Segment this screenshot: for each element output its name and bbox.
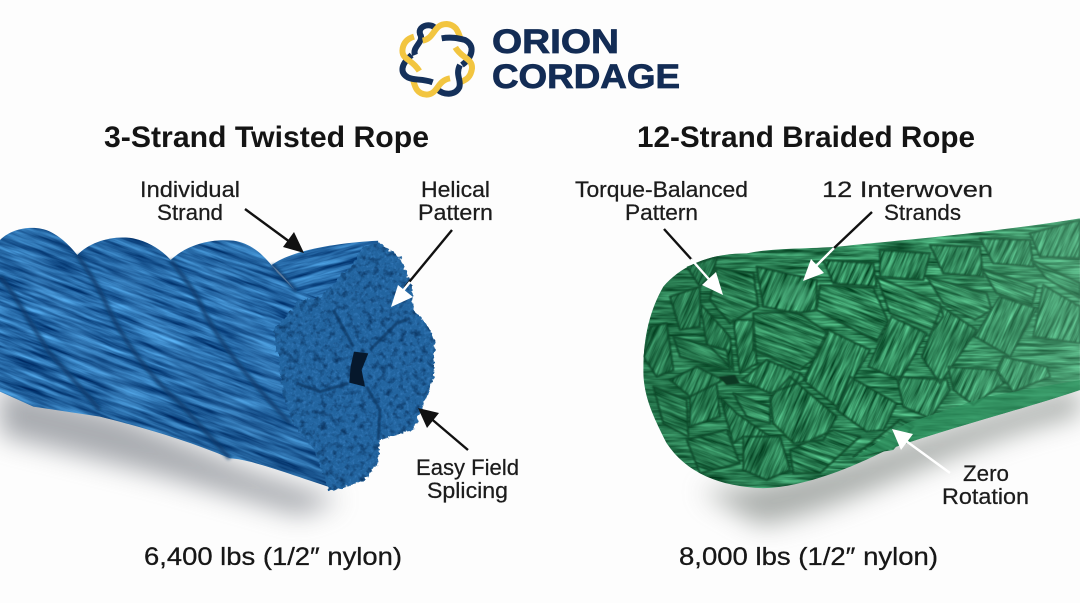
green rope photo illustration — [643, 218, 1080, 538]
blue rope body — [0, 145, 435, 529]
braid strands: along the weave — [643, 220, 1080, 480]
arrow: helical pattern — [391, 230, 452, 307]
label: torque-balanced pattern: Torque-Balanced — [575, 177, 748, 202]
strand edge shadows — [0, 255, 297, 458]
logo wordmark: CORDAGE — [492, 58, 680, 96]
label: 12 interwoven strands — [822, 177, 993, 225]
face fissures — [297, 310, 410, 440]
stat: 12-strand strength: 8,000 lbs (1/2″ nylon) — [679, 543, 938, 571]
dark core — [718, 375, 740, 385]
blue rope shadow — [0, 385, 340, 515]
logo wordmark: ORION — [492, 23, 619, 61]
label: easy field splicing: Splicing — [427, 478, 508, 503]
green rope body — [643, 218, 1080, 488]
centre highlight — [780, 284, 813, 306]
callout labels — [140, 177, 1029, 509]
back strand fibre texture — [272, 240, 378, 298]
label: individual strand: Individual — [140, 177, 240, 202]
label: 12 interwoven strands: Strands — [884, 200, 961, 225]
label: easy field splicing — [416, 455, 519, 503]
label: helical pattern: Pattern — [418, 200, 493, 225]
arrow: easy field splicing — [418, 408, 468, 450]
label: 12 interwoven strands: 12 Interwoven — [822, 177, 993, 202]
stat: 3-strand strength: 6,400 lbs (1/2″ nylon) — [144, 543, 402, 571]
lower rim band — [853, 380, 1080, 458]
arrow: zero rotation — [892, 429, 950, 473]
label: zero rotation: Rotation — [942, 484, 1029, 509]
heading: 3-strand: 3-Strand Twisted Rope — [104, 121, 429, 154]
rope shading — [0, 228, 333, 488]
label: helical pattern: Helical — [421, 177, 490, 202]
label: individual strand — [140, 177, 240, 225]
strand highlights — [23, 253, 287, 440]
green silhouette fibres — [640, 217, 1080, 490]
label: helical pattern — [418, 177, 493, 225]
blue rope photo illustration — [0, 228, 436, 529]
green rope shadow — [700, 388, 1080, 525]
label: individual strand: Strand — [157, 200, 223, 225]
arrows — [245, 209, 950, 473]
lit fade to the right — [643, 218, 1080, 488]
logo — [402, 23, 680, 96]
label: easy field splicing: Easy Field — [416, 455, 519, 480]
label: zero rotation — [942, 461, 1029, 509]
heading: 12-strand: 12-Strand Braided Rope — [637, 121, 975, 154]
logo wordmark — [492, 23, 680, 96]
label: torque-balanced pattern: Pattern — [625, 200, 698, 225]
twisted strands fibre texture — [0, 228, 328, 487]
arrow: 12 interwoven strands — [803, 212, 872, 281]
label: torque-balanced pattern — [575, 177, 748, 225]
arrow: torque-balanced pattern — [664, 229, 723, 295]
central dark gap — [349, 352, 368, 387]
arrow: individual strand — [245, 209, 304, 253]
weave shadow lines — [643, 220, 1080, 480]
braid strands: across the weave — [654, 263, 1080, 473]
label: zero rotation: Zero — [963, 461, 1009, 486]
logo mark: interwoven rings — [402, 24, 472, 95]
cut end face — [273, 243, 435, 492]
